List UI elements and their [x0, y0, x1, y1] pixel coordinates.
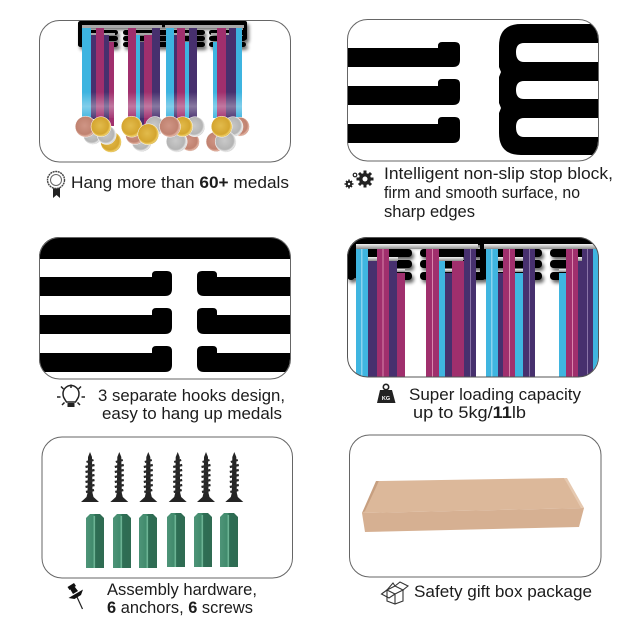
top bar: [39, 237, 290, 259]
caption: loading: Super loading capacity: [409, 385, 581, 404]
caption: stop block: [384, 164, 613, 221]
icon: weight: KG: [382, 396, 390, 402]
icon: weight: [377, 384, 396, 403]
caption: stop block: firm and smooth surface, no: [384, 183, 580, 202]
panel: non-slip stop block: [347, 20, 598, 161]
caption: stop block: Intelligent non-slip stop block,: [384, 164, 613, 183]
caption: hooks: easy to hang up medals: [102, 404, 282, 423]
rack close-up: [346, 237, 598, 280]
caption: loading: [409, 385, 581, 422]
panel: loading capacity: [346, 237, 598, 377]
caption: hardware: 6 anchors, 6 screws: [107, 598, 253, 617]
right comb: [499, 24, 598, 155]
screws: [81, 452, 243, 502]
medal rack: [78, 21, 247, 47]
caption: hardware: Assembly hardware,: [107, 580, 257, 599]
icon: gears: [344, 170, 374, 188]
caption: medals: Hang more than 60+ medals: [71, 173, 289, 192]
panel: assembly hardware: [42, 437, 292, 578]
left hooks: [39, 271, 172, 372]
icon: medal: [48, 172, 64, 198]
caption: stop block: sharp edges: [384, 202, 475, 221]
ribbons: [82, 28, 242, 126]
icon: light bulb: [57, 384, 85, 407]
caption: hooks: 3 separate hooks design,: [98, 386, 285, 405]
icon: push pin: [68, 583, 83, 609]
ribbons: [356, 249, 598, 377]
caption: box: Safety gift box package: [414, 582, 592, 601]
caption: hooks: [98, 386, 285, 423]
left hooks: [347, 42, 460, 143]
cardboard box: [362, 478, 584, 532]
panel: gift box: [350, 435, 601, 577]
panel: medals on rack: [40, 20, 290, 162]
caption: hardware: [107, 580, 257, 617]
rails: [356, 244, 598, 272]
anchors: [86, 513, 238, 568]
panel: three hooks design: [39, 237, 290, 379]
hook rails: [82, 25, 244, 35]
caption: loading: up to 5kg/ 11lb: [413, 403, 526, 422]
right hooks: [197, 271, 290, 372]
icon: box outline: [382, 582, 408, 604]
medals: [75, 116, 250, 152]
